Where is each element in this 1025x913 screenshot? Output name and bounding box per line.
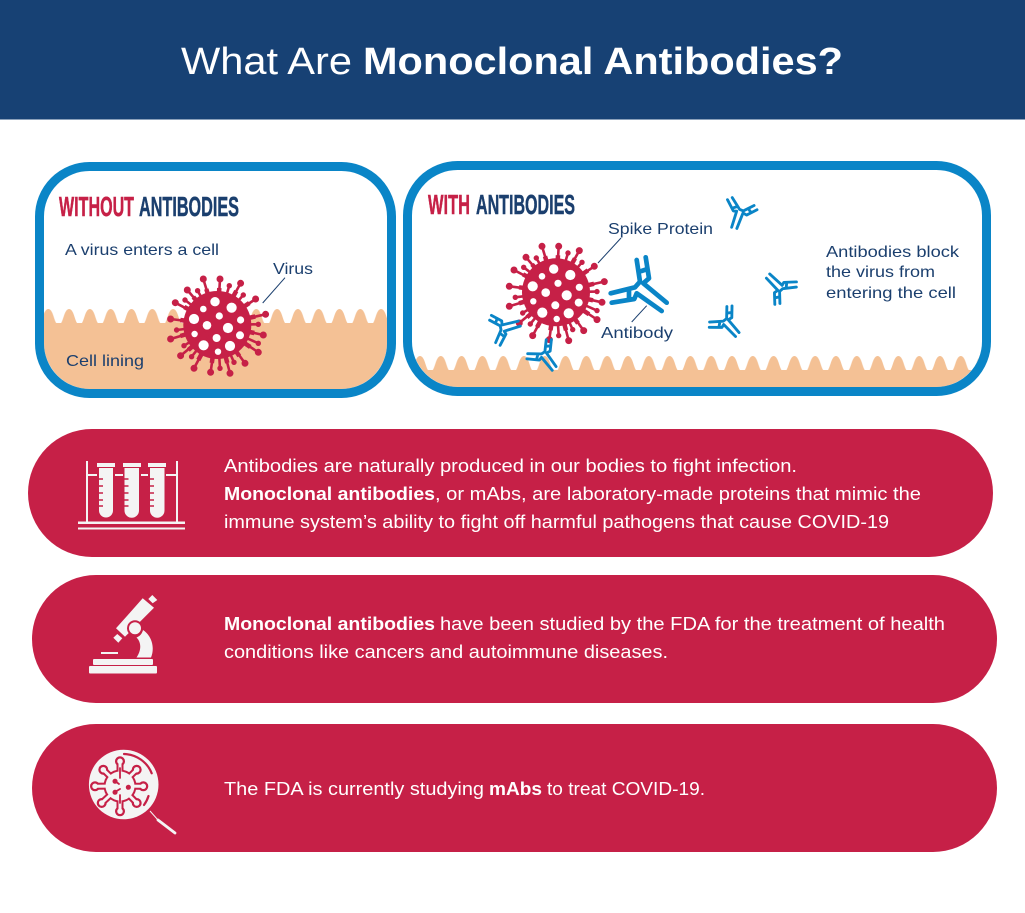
- text: antibodies block the virus: Antibodies block: [826, 244, 960, 261]
- text: antibodies description: immune system’s ability to fight off harmful pathogens that cause COVID-19: [224, 512, 889, 532]
- heading: without antibodies: ANTIBODIES: [139, 191, 239, 222]
- label: virus: Virus: [273, 261, 313, 278]
- title: What Are: [181, 41, 352, 83]
- icon: virus: [171, 279, 266, 373]
- text: FDA studying mAbs: [224, 779, 705, 799]
- label: antibody: Antibody: [601, 325, 673, 342]
- label: antibody: [601, 306, 673, 342]
- panel: COVID-19 study: [32, 724, 997, 852]
- label: cell lining: Cell lining: [66, 353, 144, 370]
- text: FDA studying mAbs: mAbs: [489, 779, 542, 799]
- text: antibodies block the virus: the virus from: [826, 264, 935, 281]
- title: [181, 41, 843, 83]
- text: FDA study description: have been studied by the FDA for the treatment of health: [440, 614, 945, 634]
- label: virus: [263, 261, 313, 303]
- icon: large antibody: [611, 257, 667, 311]
- text: FDA study description: [224, 614, 945, 662]
- heading: with antibodies: ANTIBODIES: [476, 189, 575, 220]
- heading: with antibodies: [428, 189, 575, 220]
- text: antibodies description: [224, 456, 921, 532]
- cell lining: [40, 309, 390, 391]
- text: a virus enters a cell: A virus enters a cell: [65, 242, 219, 259]
- icon: test tubes: [78, 461, 185, 530]
- text: FDA studying mAbs: to treat COVID-19.: [547, 779, 705, 799]
- text: FDA study description: Monoclonal antibodies: [224, 614, 435, 634]
- icon: magnified virus: [89, 750, 175, 833]
- text: antibodies description: Antibodies are naturally produced in our bodies to fight infection.: [224, 456, 797, 476]
- icon: virus: [509, 246, 604, 341]
- panel: FDA studies: [32, 575, 997, 703]
- label: spike protein: [598, 221, 713, 263]
- text: antibodies block the virus: entering the cell: [826, 285, 956, 302]
- header banner: [0, 0, 1025, 120]
- panel: with antibodies: [408, 166, 986, 392]
- panel: without antibodies: [40, 166, 392, 394]
- text: antibodies block the virus: [826, 244, 960, 302]
- icon: small antibodies: [480, 191, 798, 371]
- cell lining: [416, 356, 979, 387]
- heading: without antibodies: WITHOUT: [59, 191, 134, 222]
- label: spike protein: Spike Protein: [608, 221, 713, 238]
- icon: microscope: [89, 595, 157, 674]
- text: antibodies description: Monoclonal antibodies: [224, 484, 435, 504]
- panel: antibodies explained: [28, 429, 993, 557]
- text: FDA study description: conditions like cancers and autoimmune diseases.: [224, 642, 668, 662]
- text: FDA studying mAbs: The FDA is currently studying: [224, 779, 484, 799]
- heading: with antibodies: WITH: [428, 189, 470, 220]
- text: antibodies description: , or mAbs, are laboratory-made proteins that mimic the: [435, 484, 921, 504]
- title: Monoclonal Antibodies?: [363, 41, 843, 83]
